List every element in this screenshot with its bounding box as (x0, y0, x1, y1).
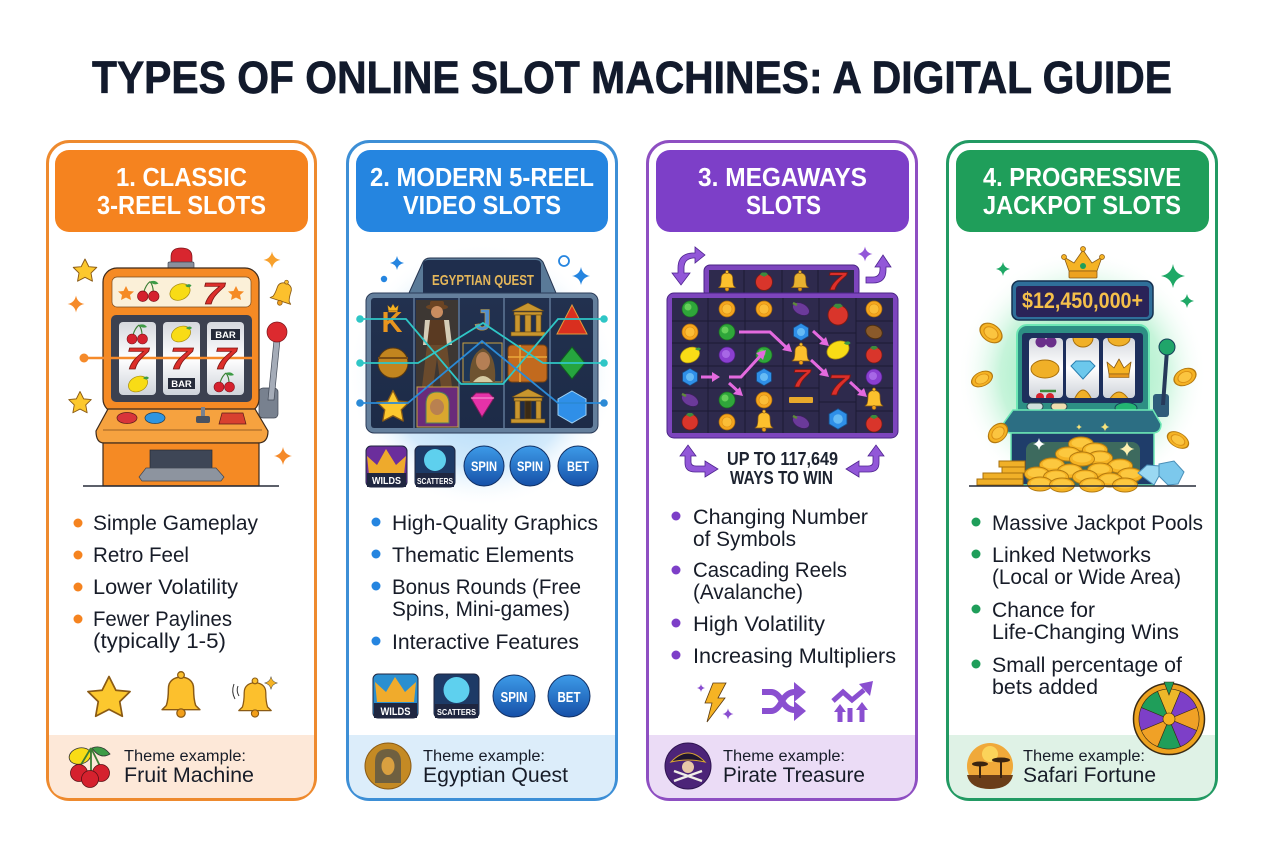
icons: star and bells (88, 672, 278, 717)
bullet list: Small percentage of (992, 654, 1182, 677)
illustration: megaways grid: 7 (827, 268, 847, 296)
illustration: video slot board (348, 243, 616, 507)
heading: classic 3-reel slots: 1. CLASSIC (116, 162, 247, 192)
coin pile (1024, 437, 1142, 492)
bullet list: (Avalanche) (693, 581, 803, 604)
footer: theme example (49, 735, 314, 798)
icon: pharaoh medallion (365, 743, 411, 789)
marquee: Egyptian Quest (409, 258, 556, 293)
ways to win label (727, 449, 838, 488)
footer: theme example: Pirate Treasure (723, 764, 865, 787)
crown (1062, 246, 1104, 278)
marquee: Egyptian Quest: EGYPTIAN QUEST (432, 272, 534, 289)
illustration: megaways grid: 7 (828, 370, 851, 402)
footer: theme example: Safari Fortune (1023, 764, 1156, 787)
footer: theme example: Theme example: (723, 748, 845, 765)
bullet list: Lower Volatility (93, 576, 239, 599)
icon: pirate medallion (665, 743, 711, 789)
woman portrait (463, 343, 502, 382)
bullet list: Fewer Paylines (93, 608, 232, 631)
heading: megaways slots: SLOTS (746, 190, 821, 220)
bullet list: Interactive Features (392, 631, 579, 654)
bullet list: Thematic Elements (392, 544, 574, 567)
illustration: jackpot machine (969, 246, 1197, 492)
buttons row: BET (567, 458, 589, 474)
icons: lightning, shuffle, chart (697, 681, 873, 722)
bullet list: (Local or Wide Area) (992, 566, 1181, 589)
jackpot display (1012, 281, 1153, 320)
footer: theme example (949, 735, 1215, 798)
buttons row: WILDS (372, 475, 401, 487)
bullet list: (typically 1-5) (93, 630, 226, 653)
pharaoh portrait (417, 387, 458, 427)
buttons row: SPIN (471, 458, 497, 474)
icons: wilds, scatters, spin, bet (373, 674, 590, 718)
bullet list: High-Quality Graphics (392, 512, 598, 535)
bullet list: Life-Changing Wins (992, 621, 1179, 644)
illustration: video slot board: J (475, 304, 491, 337)
title: TYPES OF ONLINE SLOT MACHINES: A DIGITAL GUIDE (92, 52, 1172, 103)
ways to win label: UP TO 117,649 (727, 449, 838, 469)
panel: megaways slots (648, 142, 916, 800)
illustration: video slot board: K (382, 307, 403, 339)
icons: wilds, scatters, spin, bet: WILDS (380, 706, 410, 718)
illustration: classic slot machine (68, 248, 297, 486)
illustration: classic slot machine: 7 (170, 341, 194, 376)
bullet list: Chance for (992, 599, 1095, 622)
footer: theme example: Theme example: (423, 748, 545, 765)
buttons row (366, 446, 598, 487)
illustration: classic slot machine: BAR (171, 379, 192, 390)
ways to win label: WAYS TO WIN (730, 468, 833, 488)
bullet list: High Volatility (693, 613, 826, 636)
bullet list (672, 506, 896, 668)
heading: progressive jackpot slots (956, 150, 1209, 232)
footer: theme example (649, 735, 915, 798)
bullet list: bets added (992, 676, 1098, 699)
icons: wilds, scatters, spin, bet: SCATTERS (437, 707, 476, 717)
heading: progressive jackpot slots: JACKPOT SLOTS (983, 190, 1181, 220)
footer: theme example: Theme example: (1023, 748, 1145, 765)
footer: theme example (349, 735, 615, 798)
illustration: classic slot machine: BAR (215, 330, 236, 341)
panel: classic 3-reel slots (48, 142, 316, 800)
bullet list: Linked Networks (992, 544, 1151, 567)
diamonds (1138, 461, 1184, 485)
heading: modern 5-reel video slots: 2. MODERN 5-REEL (370, 162, 594, 192)
heading: classic 3-reel slots: 3-REEL SLOTS (97, 190, 266, 220)
man figure (416, 300, 458, 387)
jackpot display: $12,450,000+ (1022, 288, 1143, 313)
bullet list: Increasing Multipliers (693, 645, 896, 668)
buttons row: SCATTERS (417, 476, 453, 486)
bullet list: Changing Number (693, 506, 868, 529)
reel symbols (1030, 338, 1132, 398)
bullet list (372, 512, 598, 654)
bullet list: Cascading Reels (693, 559, 847, 582)
coin stacks (977, 461, 1025, 485)
heading: modern 5-reel video slots (356, 150, 608, 232)
bullet list: Spins, Mini-games) (392, 598, 570, 621)
heading: classic 3-reel slots (55, 150, 308, 232)
illustration: classic slot machine: 7 (214, 341, 238, 376)
buttons row: SPIN (517, 458, 543, 474)
payline (80, 354, 253, 362)
bullet list: Simple Gameplay (93, 512, 258, 535)
illustration: classic slot machine: 7 (202, 276, 226, 311)
heading: megaways slots (656, 150, 909, 232)
heading: progressive jackpot slots: 4. PROGRESSIVE (983, 162, 1181, 192)
bullet list (74, 512, 258, 653)
bullet list: Bonus Rounds (Free (392, 576, 581, 599)
panel: modern 5-reel video slots (348, 142, 616, 800)
illustration: megaways grid: 7 (792, 365, 811, 393)
illustration: megaways grid (667, 246, 898, 488)
footer: theme example: Theme example: (124, 748, 246, 765)
icon: prize wheel (1134, 682, 1204, 754)
panel: progressive jackpot slots (948, 142, 1216, 800)
bullet list (972, 512, 1203, 699)
illustration: classic slot machine: 7 (126, 341, 150, 376)
icons: wilds, scatters, spin, bet: SPIN (500, 689, 528, 706)
paylines (360, 319, 604, 403)
heading: modern 5-reel video slots: VIDEO SLOTS (403, 190, 561, 220)
footer: theme example: Fruit Machine (124, 764, 254, 787)
pink win arrows (701, 331, 864, 395)
curved arrows (672, 247, 891, 477)
heading: megaways slots: 3. MEGAWAYS (698, 162, 867, 192)
icon: cherries and lemon (67, 745, 110, 788)
bullet list: Massive Jackpot Pools (992, 512, 1203, 535)
bullet list: Retro Feel (93, 544, 189, 567)
footer: theme example: Egyptian Quest (423, 764, 568, 787)
icons: wilds, scatters, spin, bet: BET (558, 689, 580, 706)
icon: safari medallion (967, 743, 1013, 789)
temples (511, 303, 545, 423)
bullet list: of Symbols (693, 528, 796, 551)
